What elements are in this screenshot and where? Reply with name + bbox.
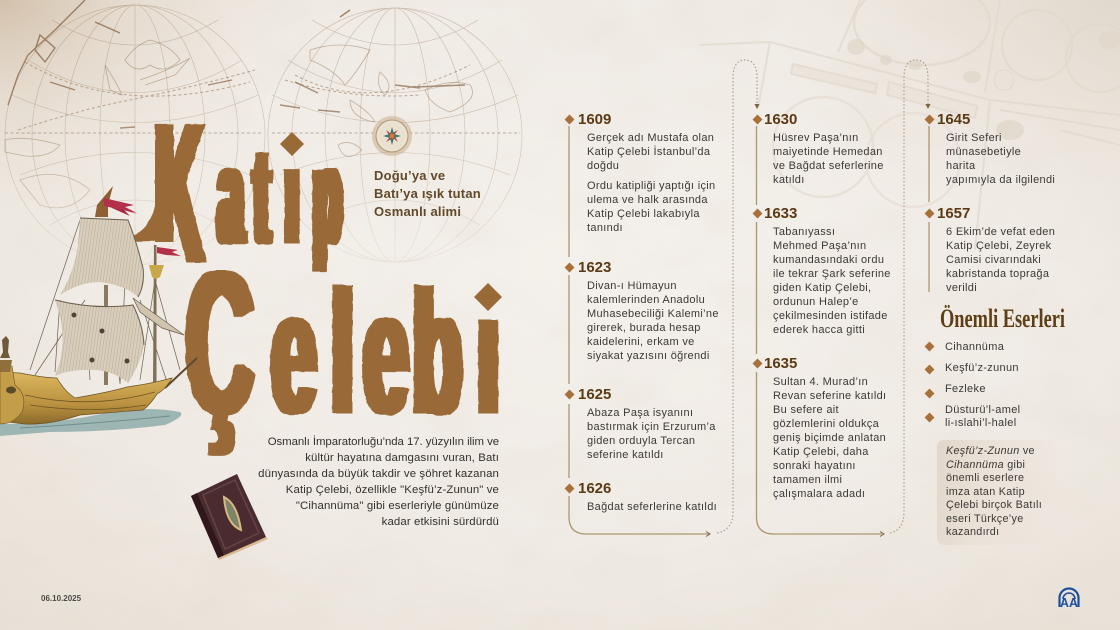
- entry: 1657: [924, 205, 1055, 294]
- entry: 1609: [564, 111, 715, 234]
- list: works: li-ıslahi’l-halel: [945, 416, 1016, 428]
- title word: Katip: K: [155, 81, 203, 305]
- callout: translation note: Çelebi birçok Batılı: [946, 499, 1042, 511]
- rigging: [30, 220, 180, 385]
- callout: translation note: kazandırdı: [946, 526, 999, 538]
- entry: 1609: 1609: [578, 111, 611, 128]
- panel: timeline column 1: tanındı: [587, 222, 623, 234]
- callout: translation note: [937, 440, 1057, 545]
- panel: timeline column 1: giden orduyla Tercan: [587, 435, 695, 447]
- title: Katip Çelebi: [134, 124, 502, 456]
- title word: Katip: atip: [218, 118, 341, 273]
- subtitle: Osmanlı alimi: [374, 204, 461, 219]
- panel: timeline column 2: ederek hacca gitti: [773, 324, 865, 336]
- subtitle: [374, 168, 481, 219]
- panel: timeline column 3: verildi: [946, 282, 977, 294]
- hull: [0, 372, 172, 424]
- panel: timeline column 2: tamamen ilmi: [773, 474, 842, 486]
- panel: timeline column 1: girerek, burada hesap: [587, 322, 701, 334]
- panel: timeline column 1: siyakat yazısını öğrendi: [587, 350, 710, 362]
- panel: timeline column 2: maiyetinde Hemedan: [773, 146, 883, 158]
- intro paragraph: Katip Çelebi, özellikle "Keşfü’z-Zunun" ve: [286, 484, 499, 496]
- list: works: Keşfü’z-zunun: [945, 362, 1019, 374]
- panel: timeline column 1: ulema ve halk arasında: [587, 194, 708, 206]
- masts: [95, 186, 113, 217]
- panel: timeline column 1: bastırmak için Erzurum’a: [587, 421, 716, 433]
- timeline connectors: lines and dotted arrows: [568, 60, 930, 537]
- panel: timeline column 1: kalemlerinden Anadolu: [587, 294, 705, 306]
- panel: timeline column 1: Katip Çelebi İstanbul’da: [587, 146, 710, 158]
- panel: timeline column 2: gözlemlerini oldukça: [773, 418, 879, 430]
- intro paragraph: Osmanlı İmparatorluğu’nda 17. yüzyılın ilim ve: [268, 436, 499, 448]
- panel: timeline column 3: Girit Seferi: [946, 132, 1002, 144]
- icon: book: [191, 474, 268, 560]
- panel: timeline column 1: doğdu: [587, 160, 619, 172]
- panel: timeline column 1: kaidelerini, erkam ve: [587, 336, 695, 348]
- diamond dot: Çelebi: [474, 283, 502, 311]
- intro paragraph: dünyasında da büyük takdir ve şöhret kazanan: [258, 468, 499, 480]
- panel: timeline column 3: Katip Çelebi, Zeyrek: [946, 240, 1051, 252]
- entry: 1633: 1633: [764, 205, 797, 222]
- panel: timeline column 3: yapımıyla da ilgilendi: [946, 174, 1055, 186]
- callout: translation note: imza atan Katip: [946, 486, 1025, 498]
- map: faint old map panels, top right: [700, 0, 1120, 250]
- callout: translation note: Keşfü’z-Zunun ve: [946, 445, 1035, 457]
- panel: timeline column 2: sonraki hayatını: [773, 460, 856, 472]
- diamond dot: Katip: [280, 132, 304, 156]
- intro paragraph: kültür hayatına damgasını vuran, Batı: [305, 452, 499, 464]
- entry: 1657: 1657: [937, 205, 970, 222]
- icon: ship illustration: [0, 186, 198, 436]
- panel: timeline column 2: Revan seferine katıldı: [773, 390, 886, 402]
- panel: timeline column 3: kabristanda toprağa: [946, 268, 1049, 280]
- panel: timeline column 2: ordunun Halep’e: [773, 296, 859, 308]
- list: works: Düsturü’l-amel: [945, 404, 1020, 416]
- panel: timeline column 3: harita: [946, 160, 975, 172]
- panel: timeline column 2: katıldı: [773, 174, 805, 186]
- panel: timeline column 2: Hüsrev Paşa’nın: [773, 132, 859, 144]
- panel: timeline column 2: [752, 111, 891, 500]
- icon: compass rose medallion: [372, 116, 412, 156]
- intro paragraph: "Cihannüma" gibi eserleriyle günümüze: [296, 500, 499, 512]
- panel: timeline column 3: 6 Ekim’de vefat eden: [946, 226, 1055, 238]
- panel: timeline column 3: Camisi civarındaki: [946, 254, 1041, 266]
- intro paragraph: kadar etkisini sürdürdü: [382, 516, 499, 528]
- panel: timeline column 1: Bağdat seferlerine katıldı: [587, 501, 717, 513]
- icon: AA logo: [1058, 587, 1080, 608]
- callout: translation note: önemli eserlere: [946, 472, 1024, 484]
- date: 06.10.2025: [41, 594, 81, 603]
- bowsprit: [165, 358, 197, 388]
- entry: 1623: [564, 259, 719, 362]
- map: left and right hemispheres: [5, 0, 522, 265]
- panel: timeline column 1: Divan-ı Hümayun: [587, 280, 677, 292]
- panel: timeline column 2: çalışmalara adadı: [773, 488, 865, 500]
- title word: Çelebi: elebi: [271, 255, 500, 452]
- subtitle: Batı’ya ışık tutan: [374, 186, 481, 201]
- panel: timeline column 2: Bu sefere ait: [773, 404, 839, 416]
- entry: 1626: 1626: [578, 480, 611, 497]
- list: works: [924, 341, 1020, 428]
- entry: 1630: [752, 111, 884, 186]
- lower sail: [55, 300, 144, 383]
- panel: timeline column 2: Mehmed Paşa’nın: [773, 240, 866, 252]
- panel: timeline column 2: Katip Çelebi, daha: [773, 446, 869, 458]
- panel: timeline column 2: Tabanıyassı: [773, 226, 835, 238]
- panel: timeline column 1: [564, 111, 719, 513]
- panel: timeline column 2: kumandasındaki ordu: [773, 254, 884, 266]
- panel: timeline column 2: Sultan 4. Murad’ın: [773, 376, 868, 388]
- panel: timeline column 2: giden Katip Çelebi,: [773, 282, 871, 294]
- top sail: [60, 218, 143, 297]
- entry: 1625: 1625: [578, 386, 611, 403]
- panel: timeline column 2: ve Bağdat seferlerine: [773, 160, 884, 172]
- panel: timeline column 1: Gerçek adı Mustafa olan: [587, 132, 714, 144]
- entry: 1635: [752, 355, 886, 500]
- panel: timeline column 1: seferine katıldı: [587, 449, 664, 461]
- callout: translation note: eseri Türkçe’ye: [946, 512, 1024, 524]
- entry: 1626: [564, 480, 717, 513]
- entry: 1635: 1635: [764, 355, 797, 372]
- water: [0, 409, 181, 436]
- subtitle: Doğu’ya ve: [374, 168, 445, 183]
- entry: 1645: [924, 111, 1055, 186]
- panel: timeline column 1: Katip Çelebi lakabıyla: [587, 208, 700, 220]
- entry: 1623: 1623: [578, 259, 611, 276]
- panel: timeline column 3: [924, 111, 1055, 294]
- panel: timeline column 1: Ordu katipliği yaptığı için: [587, 180, 715, 192]
- entry: 1645: 1645: [937, 111, 970, 128]
- entry: 1633: [752, 205, 891, 336]
- panel: timeline column 1: Muhasebeciliği Kalemi’ne: [587, 308, 719, 320]
- jib: [133, 298, 184, 335]
- K swash: [134, 206, 155, 242]
- panel: timeline column 2: ile tekrar Şark seferine: [773, 268, 891, 280]
- panel: timeline column 2: çekilmesinden istifade: [773, 310, 888, 322]
- title word: Çelebi: Ç: [186, 228, 254, 457]
- callout: translation note: Cihannüma gibi: [946, 458, 1025, 470]
- entry: 1625: [564, 386, 716, 461]
- panel: timeline column 1: Abaza Paşa isyanını: [587, 407, 693, 419]
- panel: timeline column 2: geniş biçimde anlatan: [773, 432, 886, 444]
- intro paragraph: [258, 436, 499, 528]
- panel: timeline column 3: münasebetiyle: [946, 146, 1021, 158]
- list: works: Cihannüma: [945, 341, 1004, 353]
- list: works: Fezleke: [945, 383, 986, 395]
- flags: [102, 200, 137, 216]
- entry: 1630: 1630: [764, 111, 797, 128]
